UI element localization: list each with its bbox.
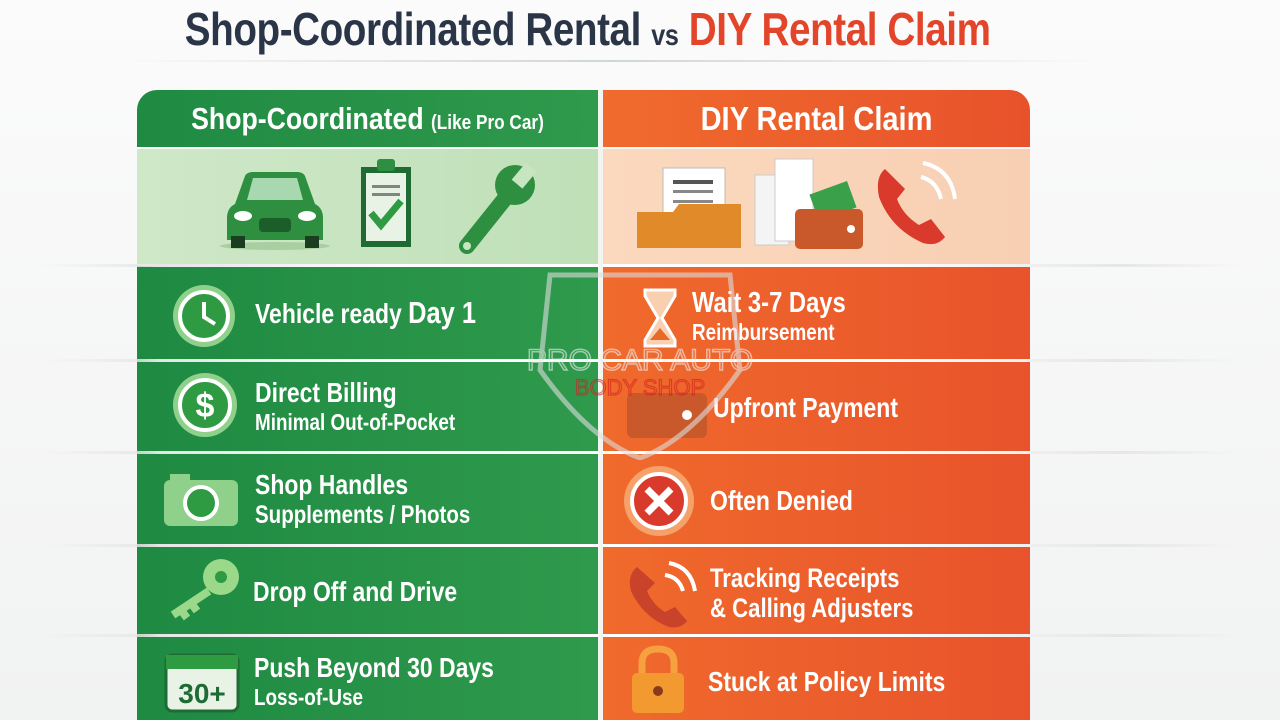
row 1 left: vehicle ready — [173, 285, 476, 347]
row 2 left: direct billing: Minimal Out-of-Pocket — [255, 409, 455, 435]
row 3 left: shop handles — [164, 469, 470, 529]
icon: dollar coin — [173, 373, 237, 437]
row 4 right: tracking receipts: & Calling Adjusters — [710, 593, 913, 623]
row 4 right: tracking receipts — [630, 561, 913, 628]
row 4 left: drop off — [170, 559, 457, 620]
row 1 right: wait: Wait 3-7 Days — [692, 287, 846, 319]
watermark logo: PRO CAR AUTO — [527, 344, 753, 377]
panel: DIY header — [603, 90, 1030, 147]
row 5 left: push beyond 30 days: Push Beyond 30 Days — [254, 652, 494, 683]
row 3 right: often denied — [624, 466, 853, 536]
title: Shop-Coordinated Rental vs DIY Rental Claim — [185, 3, 991, 55]
row 5 right: policy limits — [632, 646, 945, 713]
row 2 left: direct billing: Direct Billing — [255, 377, 397, 408]
icon: wrench — [459, 165, 535, 254]
icon: folder of documents — [637, 168, 741, 248]
row 5 right: policy limits: Stuck at Policy Limits — [708, 666, 945, 697]
row 4 left: drop off: Drop Off and Drive — [253, 576, 457, 607]
icon: receipts and wallet — [754, 158, 863, 249]
icon: padlock — [632, 646, 684, 713]
row 4 right: tracking receipts: Tracking Receipts — [710, 563, 900, 593]
row 3 right: often denied: Often Denied — [710, 485, 853, 516]
panel: DIY header: DIY Rental Claim — [701, 100, 932, 137]
row 2 left: direct billing — [173, 373, 455, 437]
row 2 right: upfront payment — [627, 392, 898, 438]
icon: red x — [624, 466, 694, 536]
icon: key — [170, 559, 239, 620]
icon: camera — [164, 474, 238, 526]
panel: shop-coordinated header — [137, 90, 598, 147]
icon: car — [220, 172, 330, 250]
icon: calendar 30+: 30+ — [178, 678, 226, 709]
row 5 left: push beyond 30 days — [164, 652, 494, 712]
row backgrounds — [137, 266, 598, 720]
row 2 right: upfront payment: Upfront Payment — [713, 392, 898, 423]
watermark logo: BODY SHOP — [575, 375, 705, 400]
icon: phone — [878, 161, 957, 244]
watermark logo — [527, 272, 753, 460]
icon: hourglass — [644, 288, 676, 348]
icon band right — [603, 149, 1030, 264]
icon: calendar 30+ — [164, 654, 240, 712]
row 3 left: shop handles: Shop Handles — [255, 469, 408, 500]
icon: phone — [630, 561, 697, 628]
row 3 left: shop handles: Supplements / Photos — [255, 501, 470, 529]
row 1 left: vehicle ready: Vehicle ready Day 1 — [255, 295, 476, 330]
panel: shop-coordinated header: Shop-Coordinated (Like Pro Car) — [191, 101, 544, 136]
icon: clock — [173, 285, 235, 347]
icon: dollar coin: $ — [196, 387, 215, 425]
row 1 right: wait: Reimbursement — [692, 319, 835, 345]
icon: wallet — [627, 393, 707, 438]
icon: clipboard — [361, 159, 411, 247]
row 1 right: wait — [644, 287, 846, 348]
row 5 left: push beyond 30 days: Loss-of-Use — [254, 684, 363, 710]
icon band left — [137, 149, 598, 264]
